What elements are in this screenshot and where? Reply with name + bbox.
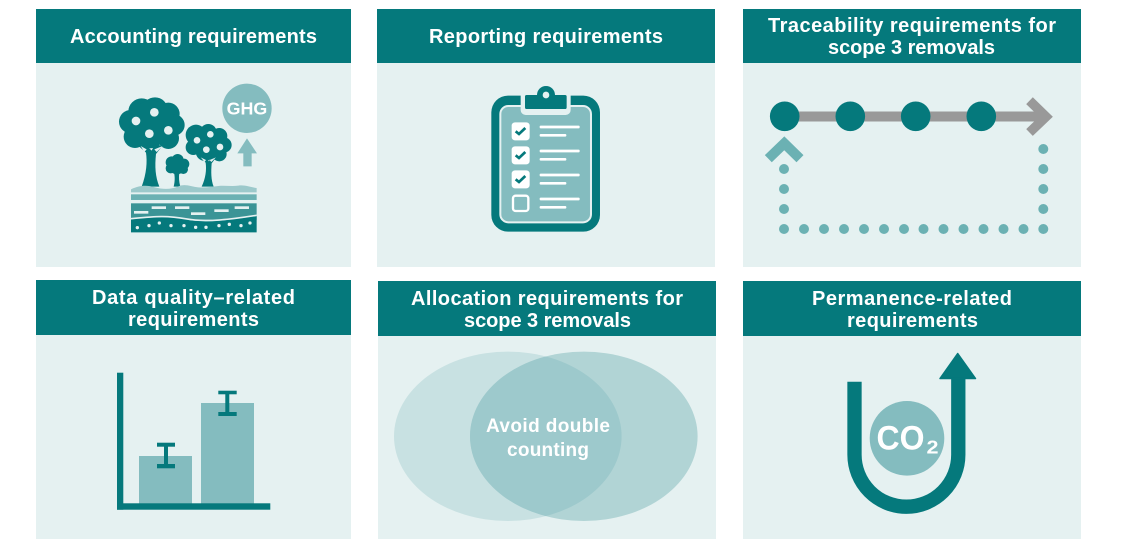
heading: traceability requirements: Traceability requirements for: [768, 15, 1056, 37]
heading: reporting requirements: Reporting requirements: [429, 26, 663, 48]
heading: permanence requirements: Permanence-related: [812, 288, 1012, 310]
diagram: overlapping ellipses: Avoid double: [486, 416, 610, 437]
panel: accounting requirements: [36, 9, 351, 267]
heading: traceability requirements: [743, 9, 1081, 63]
heading: accounting requirements: Accounting requirements: [70, 26, 317, 48]
heading: data quality requirements: Data quality–related: [92, 287, 295, 309]
heading: permanence requirements: [743, 281, 1081, 336]
icon: traceability chain arrow: [768, 101, 1048, 234]
icon: CO2 U-shaped arrow: [854, 354, 976, 507]
panel: data quality requirements: [36, 280, 351, 539]
diagram: overlapping ellipses: [394, 352, 698, 521]
icon: CO2 U-shaped arrow: 2: [926, 438, 938, 458]
icon: CO2 U-shaped arrow: CO: [876, 420, 924, 458]
heading: accounting requirements: [36, 9, 351, 63]
heading: allocation requirements: [378, 281, 716, 336]
panel: traceability requirements: [743, 9, 1081, 267]
icon: clipboard checklist: [491, 86, 600, 232]
heading: permanence requirements: requirements: [847, 310, 978, 332]
diagram: overlapping ellipses: counting: [507, 440, 589, 461]
heading: data quality requirements: requirements: [128, 309, 259, 331]
chart: bars with error bars: [117, 373, 270, 510]
panel: permanence requirements: [743, 281, 1081, 539]
heading: allocation requirements: Allocation requirements for: [411, 288, 683, 310]
icon: trees, soil layers and GHG: [119, 84, 272, 232]
heading: allocation requirements: scope 3 removals: [464, 310, 631, 332]
panel: reporting requirements: [377, 9, 715, 267]
panel: allocation requirements: [378, 281, 716, 539]
icon: trees, soil layers and GHG: GHG: [227, 99, 267, 119]
heading: data quality requirements: [36, 280, 351, 335]
heading: reporting requirements: [377, 9, 715, 63]
heading: traceability requirements: scope 3 removals: [828, 37, 995, 59]
